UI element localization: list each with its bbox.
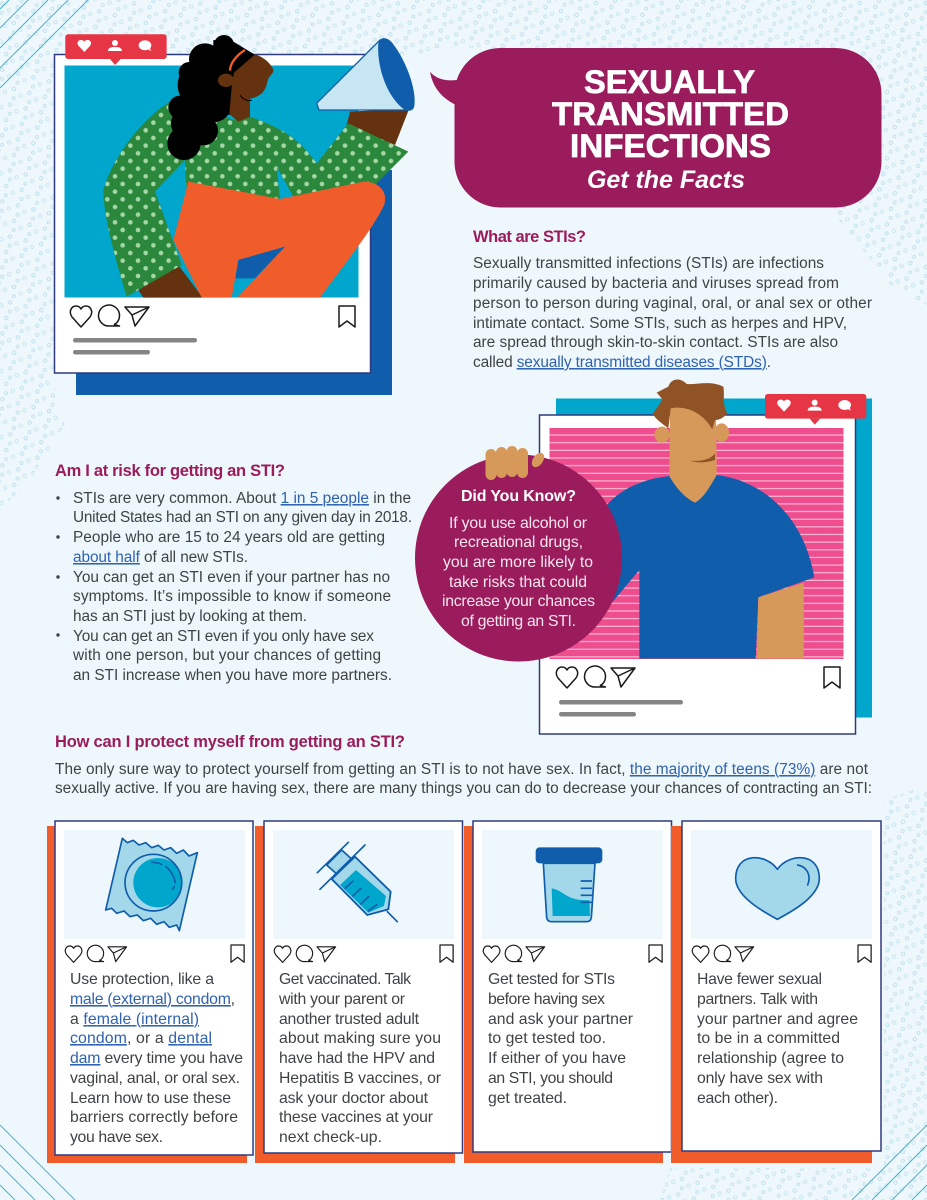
text block: am I at risk: symptoms. It’s impossible to know if someone <box>73 588 391 605</box>
panel: get tested: If either of you have <box>488 1050 626 1067</box>
text block: what are STIs: called sexually transmitted diseases (STDs). <box>473 354 771 371</box>
panel: use protection <box>47 821 253 1163</box>
text block: am I at risk: about half of all new STIs. <box>73 549 248 566</box>
panel: get vaccinated: Get vaccinated. Talk <box>279 971 411 988</box>
icon: condom wrapper <box>106 838 197 931</box>
icon: hand gripping circle <box>486 446 547 480</box>
text block: am I at risk: with one person, but your chances of getting <box>72 647 381 664</box>
callout: did you know: Did You Know? <box>461 488 576 505</box>
panel: get tested: get treated. <box>488 1090 567 1107</box>
post photo striped background <box>550 428 844 659</box>
callout: did you know: recreational drugs, <box>454 534 583 551</box>
text block: what are STIs: intimate contact. Some STIs, such as herpes and HPV, <box>473 315 847 332</box>
callout: did you know: you are more likely to <box>443 554 593 571</box>
panel: use protection: condom, or a dental <box>70 1030 212 1047</box>
panel: use protection: male (external) condom, <box>70 991 235 1008</box>
social notification badge <box>765 394 866 425</box>
text block: am I at risk: STIs are very common. About 1 in 5 people in the <box>73 490 411 507</box>
panel: get vaccinated: another trusted adult <box>279 1011 420 1028</box>
text block: how can I protect myself: The only sure way to protect yourself from getting an STI is to not have sex. In fact, the majority of teens (73%) are not <box>55 761 869 778</box>
panel: use protection: barriers correctly before <box>70 1109 238 1126</box>
post action icons <box>70 305 355 327</box>
post shadow <box>556 398 872 718</box>
panel: get tested: Get tested for STIs <box>488 971 615 988</box>
panel: get vaccinated: ask your doctor about <box>279 1090 429 1107</box>
post caption placeholder bars <box>559 700 683 716</box>
callout: did you know: increase your chances <box>442 593 595 610</box>
panel: get vaccinated: have had the HPV and <box>279 1050 435 1067</box>
panel: get tested <box>464 821 672 1163</box>
heading: Am I at risk for getting an STI? <box>55 462 285 480</box>
panel: get vaccinated: next check-up. <box>279 1129 382 1146</box>
title: SEXUALLY <box>584 64 755 100</box>
post card <box>540 415 856 734</box>
panel: fewer partners: relationship (agree to <box>697 1050 844 1067</box>
post action icons <box>692 945 871 962</box>
panel: use protection: dam every time you have <box>70 1050 243 1067</box>
panel: fewer partners: to be in a committed <box>697 1030 840 1047</box>
panel: get vaccinated: with your parent or <box>278 991 405 1008</box>
text block: what are STIs: primarily caused by bacteria and viruses spread from <box>473 275 839 292</box>
text block: am I at risk: has an STI just by looking at them. <box>73 608 307 625</box>
icon: specimen cup <box>536 847 602 922</box>
title speech bubble: TRANSMITTED <box>552 96 789 132</box>
panel: get vaccinated: these vaccines at your <box>279 1109 433 1126</box>
callout: did you know: of getting an STI. <box>461 613 576 630</box>
panel: fewer partners <box>671 821 881 1163</box>
social notification badge <box>65 34 167 65</box>
illustration: man <box>607 379 814 659</box>
heading: How can I protect myself from getting an STI? <box>55 733 405 751</box>
bullet markers <box>56 496 60 637</box>
text block: am I at risk: People who are 15 to 24 years old are getting <box>73 529 385 546</box>
text block: am I at risk: United States had an STI on any given day in 2018. <box>73 509 412 526</box>
panel: use protection: Learn how to use these <box>70 1090 231 1107</box>
post caption placeholder bars <box>73 338 197 354</box>
panel: get vaccinated: about making sure you <box>279 1030 441 1047</box>
callout: did you know: If you use alcohol or <box>449 515 587 532</box>
icon: heart <box>736 858 819 919</box>
post action icons <box>274 945 453 962</box>
panel: get tested: to get tested too. <box>488 1030 606 1047</box>
panel: fewer partners: each other). <box>697 1090 778 1107</box>
text block: am I at risk <box>55 462 412 684</box>
callout: did you know <box>415 446 622 662</box>
panel: use protection: a female (internal) <box>70 1011 199 1028</box>
post action icons <box>65 945 244 962</box>
panel: use protection: you have sex. <box>70 1129 163 1146</box>
title speech bubble: INFECTIONS <box>570 128 771 164</box>
panel: get vaccinated <box>255 821 462 1163</box>
illustration: woman with megaphone <box>103 35 415 298</box>
post shadow <box>76 170 392 395</box>
panel: get tested: before having sex <box>488 991 605 1008</box>
panel: fewer partners: only have sex with <box>697 1070 823 1087</box>
heading: What are STIs? <box>473 228 586 246</box>
panel: fewer partners: your partner and agree <box>697 1011 858 1028</box>
icon: syringe <box>317 842 397 922</box>
text block: am I at risk: an STI increase when you have more partners. <box>73 667 392 684</box>
panel: fewer partners: Have fewer sexual <box>697 971 822 988</box>
text block: what are STIs: person to person during vaginal, oral, or anal sex or other <box>473 295 872 312</box>
title speech bubble <box>430 48 882 208</box>
panel: get tested: an STI, you should <box>488 1070 613 1087</box>
text block: what are STIs: are spread through skin-to-skin contact. STIs are also <box>473 334 838 351</box>
panel: fewer partners: partners. Talk with <box>697 991 818 1008</box>
post card <box>54 54 370 373</box>
text block: how can I protect myself: sexually active. If you are having sex, there are many things you can do to decrease your chances of contracting an STI: <box>55 780 872 797</box>
callout: did you know: take risks that could <box>449 574 587 591</box>
panel: woman post <box>54 34 415 395</box>
title speech bubble: Get the Facts <box>587 166 745 194</box>
panel: get vaccinated: Hepatitis B vaccines, or <box>279 1070 441 1087</box>
text block: am I at risk: You can get an STI even if your partner has no <box>73 569 390 586</box>
post action icons <box>556 666 840 688</box>
text block: how can I protect myself <box>55 733 872 797</box>
panel: use protection: vaginal, anal, or oral sex. <box>70 1070 240 1087</box>
panel: use protection: Use protection, like a <box>70 971 214 988</box>
post action icons <box>483 945 662 962</box>
text block: what are STIs <box>473 228 872 371</box>
panel: man post <box>540 379 872 734</box>
panel: get tested: and ask your partner <box>488 1011 633 1028</box>
text block: what are STIs: Sexually transmitted infections (STIs) are infections <box>473 255 824 272</box>
post photo background <box>64 66 358 298</box>
text block: am I at risk: You can get an STI even if you only have sex <box>73 628 374 645</box>
